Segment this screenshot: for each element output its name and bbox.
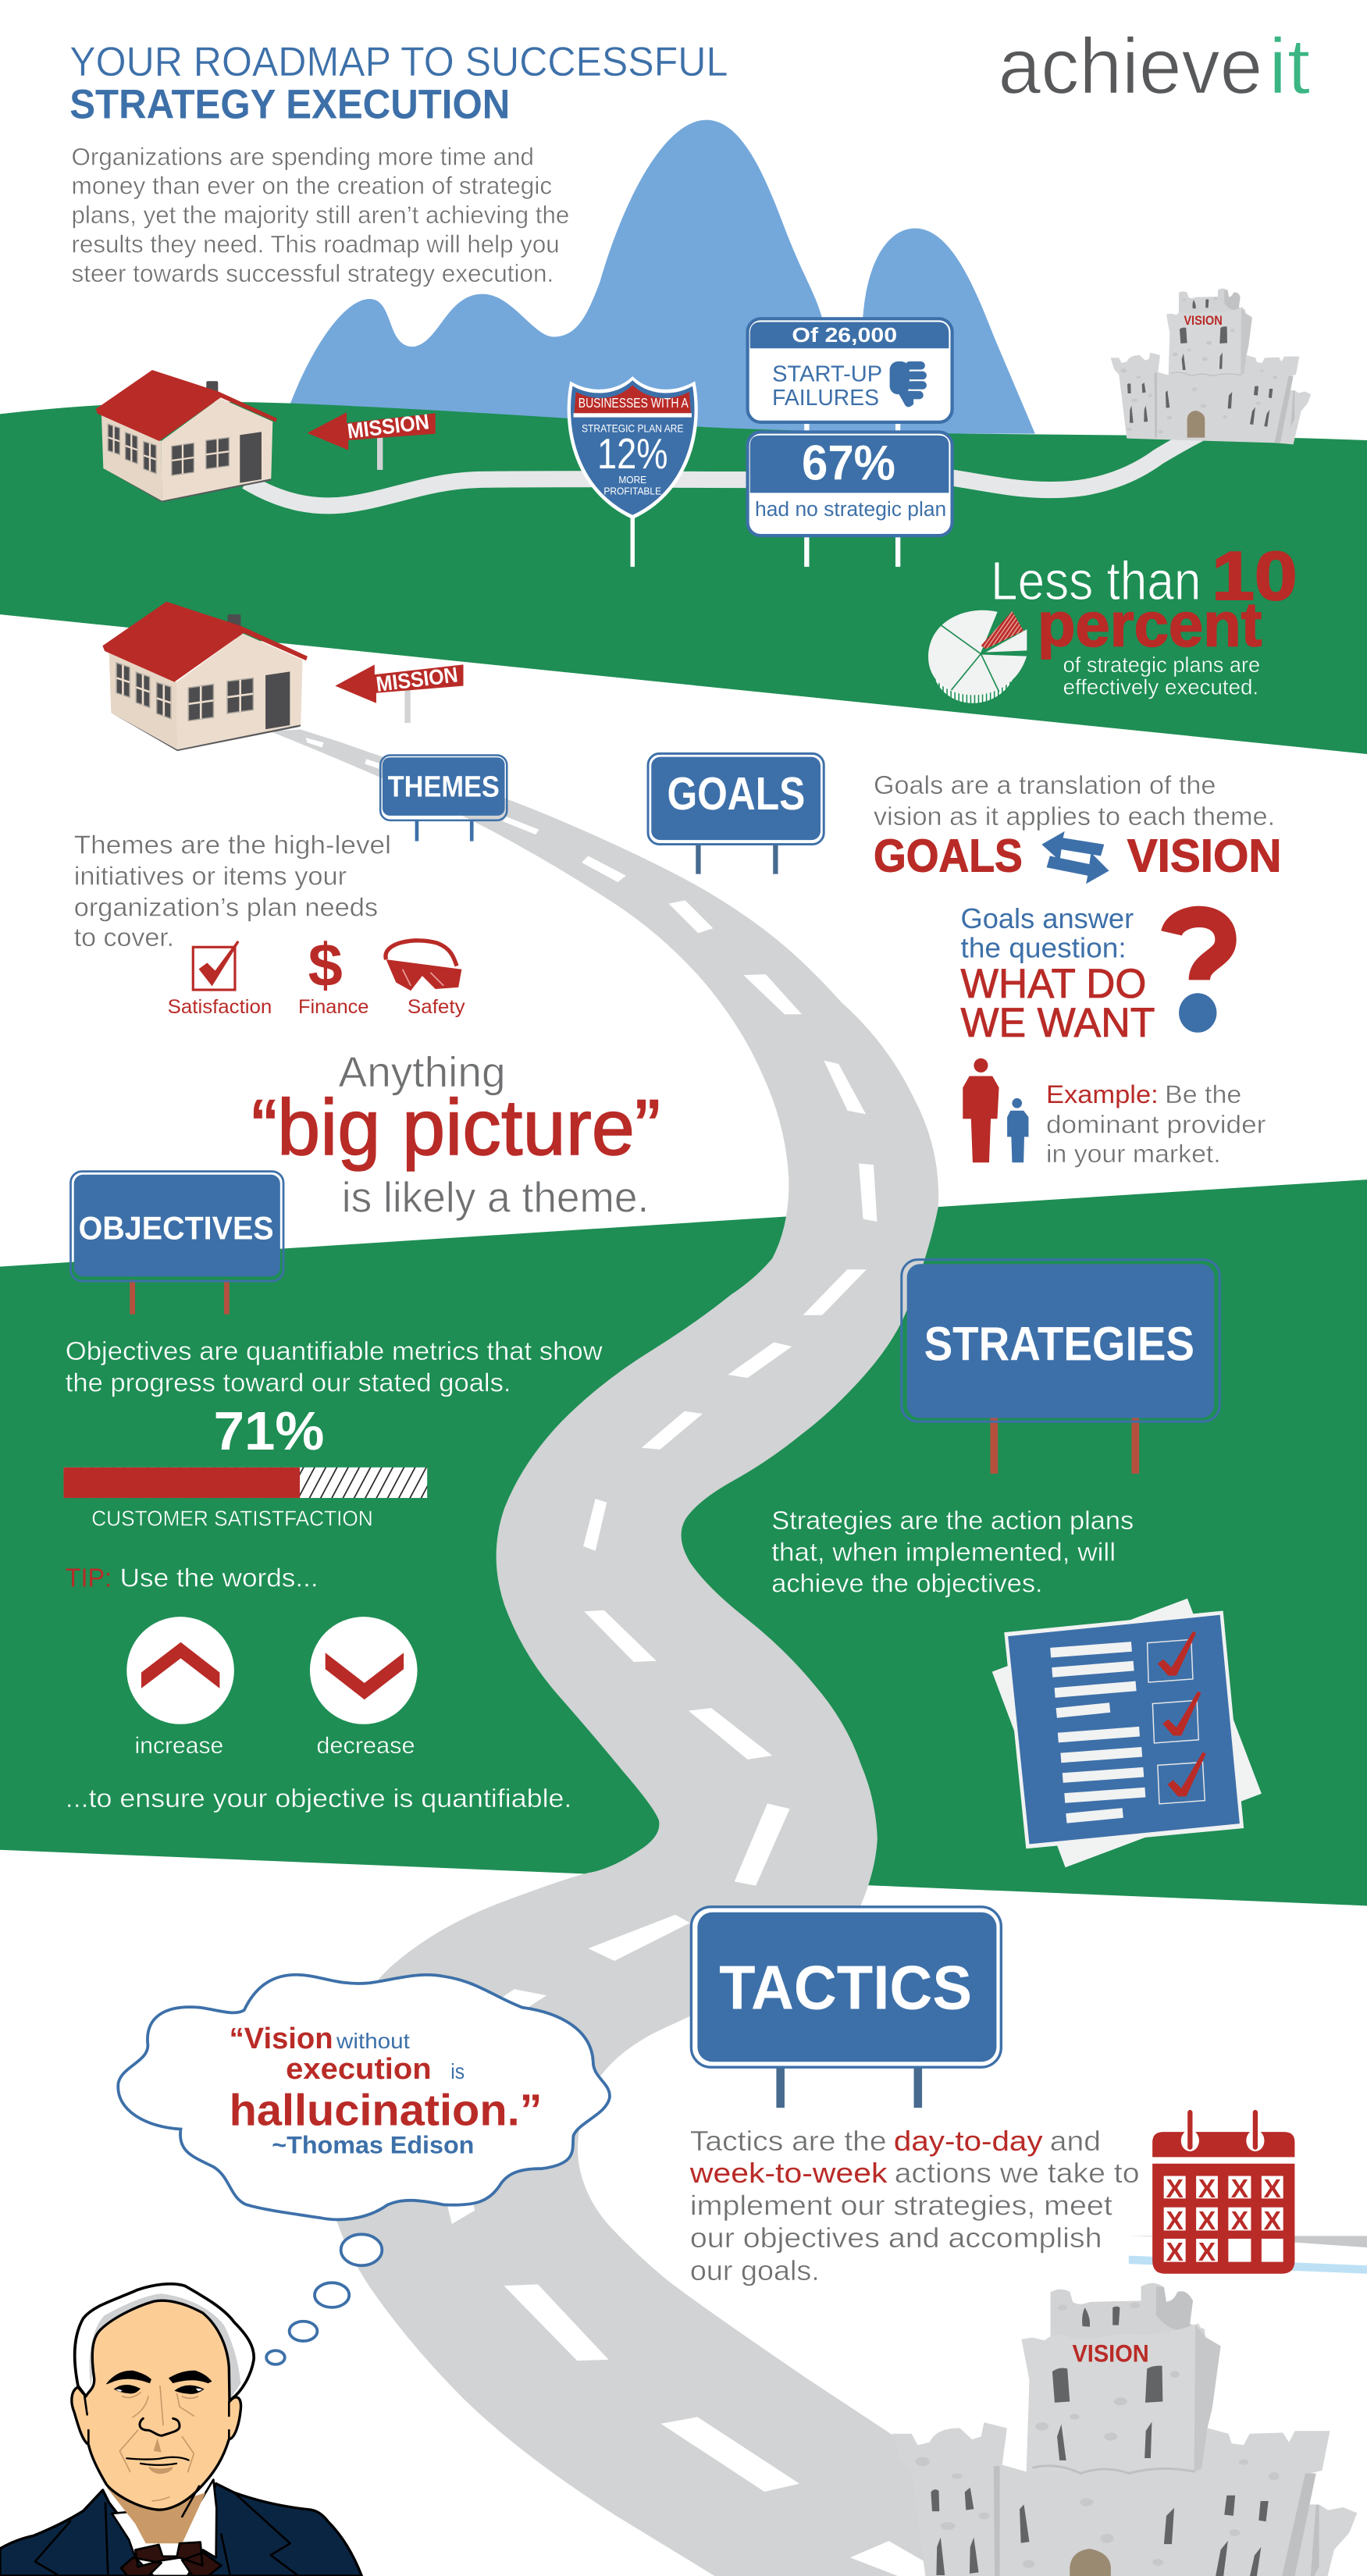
road centre dashes [305, 738, 949, 2576]
sign: goals [648, 753, 824, 874]
text: themes description: Themes are the high-level [74, 831, 391, 859]
text: objectives description [66, 1337, 603, 1397]
billboard: 67 percent had no strategic plan: had no strategic plan [755, 497, 946, 521]
green band: upper [0, 402, 1367, 754]
stat: less than 10 percent: of strategic plans are [1063, 653, 1260, 677]
intro text: steer towards successful strategy execution. [72, 259, 554, 287]
stat: less than 10 percent: percent [1038, 590, 1262, 660]
text: strategies description: Strategies are the action plans [771, 1507, 1134, 1535]
facial shading [119, 2386, 198, 2501]
text: strategies description: that, when implemented, will [771, 1538, 1116, 1567]
text: tactics description: our goals. [690, 2255, 820, 2286]
intro text: money than ever on the creation of strategic [72, 171, 552, 199]
face [72, 2300, 241, 2510]
sign: goals: GOALS [667, 769, 805, 820]
text: goals example: dominant provider [1046, 1109, 1266, 1138]
intro text: results they need. This roadmap will help you [72, 229, 560, 258]
icon: checklist [992, 1599, 1262, 1867]
text: tactics description [689, 2126, 1140, 2286]
icon: calendar: X [1166, 2207, 1184, 2236]
icons: satisfaction, finance, safety: Finance [298, 996, 368, 1018]
portrait: Thomas Edison [0, 2284, 361, 2576]
thought bubble trail [266, 2234, 382, 2364]
text: objectives description: Objectives are quantifiable metrics that show [66, 1337, 603, 1366]
progress bar: 71 percent customer satisfaction [63, 1400, 427, 1531]
text: themes description [74, 831, 391, 952]
text: quantifiable: ...to ensure your objective is quantifiable. [66, 1784, 571, 1813]
shield sign: 12 percent [568, 376, 698, 567]
icon: calendar: X [1166, 2175, 1184, 2204]
icon: question mark [1172, 916, 1226, 1033]
mission sign: top [308, 409, 436, 470]
castle: top [1111, 289, 1311, 444]
icon: calendar: X [1264, 2175, 1282, 2204]
icon: decrease [310, 1617, 418, 1759]
thought bubble: Edison quote: without [336, 2029, 410, 2053]
icon: checkbox [193, 941, 238, 990]
icon: calendar: X [1198, 2238, 1216, 2267]
billboard: 67 percent had no strategic plan [748, 432, 952, 567]
billboard: of 26,000 start-up failures [748, 318, 952, 432]
progress bar: 71 percent customer satisfaction: CUSTOMER SATISTFACTION [91, 1507, 373, 1531]
sign: objectives: OBJECTIVES [79, 1210, 274, 1247]
text: tactics description: implement our strategies, meet [690, 2190, 1112, 2221]
shirt collar [112, 2480, 216, 2576]
progress bar: 71 percent customer satisfaction: 71% [214, 1400, 324, 1461]
callout: big picture: “big picture” [251, 1084, 660, 1172]
sign: strategies: STRATEGIES [924, 1318, 1194, 1371]
shield sign: 12 percent: PROFITABLE [603, 486, 661, 496]
text: themes description: organization’s plan needs [74, 894, 378, 923]
icons: satisfaction, finance, safety: Safety [408, 996, 465, 1018]
jacket lapels [35, 2492, 297, 2576]
thought bubble: Edison quote: “Vision [230, 2023, 333, 2055]
icon: calendar: X [1231, 2207, 1249, 2236]
goals answer the question: Goals answer [961, 903, 1134, 934]
icon: people [963, 1059, 1028, 1162]
shield sign: 12 percent: 12% [597, 429, 668, 478]
text: themes description: initiatives or items your [74, 863, 347, 891]
brows, eyes, nose and mouth [107, 2371, 212, 2384]
sign: tactics: TACTICS [719, 1952, 972, 2022]
castle: bottom: VISION [1072, 2339, 1149, 2368]
icons: satisfaction, finance, safety: Satisfaction [168, 996, 272, 1018]
icon: calendar: X [1264, 2207, 1282, 2236]
tip text: TIP: [66, 1564, 112, 1593]
title: STRATEGY EXECUTION [69, 82, 510, 128]
text: tactics description: day-to-day [894, 2126, 1043, 2157]
jacket [0, 2484, 361, 2576]
text: goals example: Example: [1046, 1080, 1159, 1108]
castle: bottom [892, 2283, 1357, 2576]
text: strategies description [771, 1507, 1134, 1598]
text: themes description: to cover. [74, 923, 174, 952]
text: goals example [1046, 1080, 1266, 1168]
house: top [96, 370, 277, 502]
stat: less than 10 percent: effectively executed. [1063, 675, 1258, 699]
icon: calendar: X [1166, 2238, 1184, 2267]
text: tactics description: actions we take to [895, 2158, 1140, 2189]
neck [107, 2488, 205, 2543]
callout: big picture [251, 1048, 660, 1221]
icon: dollar: $ [308, 932, 343, 999]
logo: achieveit: achieve [999, 23, 1262, 110]
main road [269, 729, 1052, 2576]
thought bubble: Edison quote: ~Thomas Edison [272, 2131, 474, 2159]
text: tactics description: and [1050, 2126, 1101, 2157]
thought bubble: Edison quote [118, 1975, 610, 2219]
mission sign: top: MISSION [346, 409, 430, 443]
hair [75, 2284, 254, 2399]
thought bubble: Edison quote: is [450, 2059, 465, 2083]
logo: achieveit: it [1269, 23, 1310, 110]
castle: top: VISION [1184, 313, 1223, 328]
small road: mission to vision [247, 434, 1199, 506]
text: goals example: in your market. [1046, 1139, 1221, 1168]
text: objectives description: the progress toward our stated goals. [66, 1368, 511, 1397]
sign: themes: THEMES [388, 771, 500, 804]
text: tactics description: week-to-week [689, 2158, 888, 2189]
icon: two-way arrows [1041, 831, 1109, 884]
callout: big picture: is likely a theme. [342, 1172, 649, 1221]
icon: decrease: decrease [316, 1733, 415, 1759]
mountains [287, 120, 1035, 434]
callout: big picture: Anything [339, 1048, 506, 1096]
icon: calendar [1152, 2112, 1294, 2274]
intro text [72, 143, 569, 287]
sign: themes [380, 755, 507, 841]
billboard: of 26,000 start-up failures: START-UP [772, 361, 882, 386]
goals answer the question: WE WANT [961, 1000, 1155, 1046]
goals to vision: VISION [1127, 831, 1282, 881]
mission sign: second [335, 662, 463, 723]
hair shading [90, 2293, 240, 2399]
sign: strategies [902, 1260, 1219, 1474]
icons: satisfaction, finance, safety [168, 932, 465, 1018]
text: strategies description: achieve the objectives. [771, 1569, 1043, 1598]
stat: less than 10 percent: 10 [1212, 537, 1298, 614]
icon: pie chart [928, 610, 1027, 703]
text: tactics description: our objectives and accomplish [690, 2222, 1102, 2254]
title: YOUR ROADMAP TO SUCCESSFUL [69, 39, 728, 85]
icon: increase [126, 1617, 234, 1759]
sign: objectives [70, 1172, 283, 1315]
icon: calendar: X [1198, 2175, 1216, 2204]
green band: lower [0, 1179, 1367, 1905]
text: goals example: Be the [1165, 1080, 1241, 1108]
house: second [102, 602, 308, 751]
icon: thumbs down [890, 361, 927, 407]
goals to vision: GOALS [874, 831, 1023, 881]
title [69, 39, 728, 128]
billboard: of 26,000 start-up failures: Of 26,000 [792, 323, 897, 347]
intro text: Organizations are spending more time and [72, 143, 534, 171]
icon: increase: increase [135, 1733, 223, 1759]
text: goals description: Goals are a translation of the [874, 771, 1216, 800]
goals answer the question [961, 903, 1155, 1046]
intro text: plans, yet the majority still aren’t achieving the [72, 201, 569, 229]
bow tie [121, 2542, 221, 2576]
tip text: Use the words... [120, 1564, 319, 1593]
shield sign: 12 percent: BUSINESSES WITH A [578, 395, 689, 411]
stat: less than 10 percent: Less than [991, 550, 1201, 611]
faint lines behind calendar [1129, 2236, 1367, 2274]
icon: calendar: X [1198, 2207, 1216, 2236]
icon: calendar: X [1231, 2175, 1249, 2204]
thought bubble: Edison quote: execution [286, 2053, 432, 2086]
stat: less than 10 percent [991, 537, 1298, 699]
shield sign: 12 percent: STRATEGIC PLAN ARE [582, 423, 683, 435]
icon: safety goggles [386, 941, 461, 991]
goals to vision [874, 831, 1282, 884]
text: goals description: vision as it applies to each theme. [874, 802, 1275, 831]
mission sign: second: MISSION [375, 662, 459, 696]
thought bubble: Edison quote: hallucination.” [230, 2087, 543, 2136]
billboard: 67 percent had no strategic plan: 67% [802, 436, 895, 491]
goals answer the question: the question: [961, 932, 1127, 963]
text: tactics description: Tactics are the [690, 2126, 887, 2157]
shield sign: 12 percent: MORE [618, 475, 646, 486]
goals answer the question: WHAT DO [961, 961, 1146, 1007]
sign: tactics [691, 1907, 1001, 2108]
text: goals description [874, 771, 1275, 831]
billboard: of 26,000 start-up failures: FAILURES [772, 386, 879, 411]
